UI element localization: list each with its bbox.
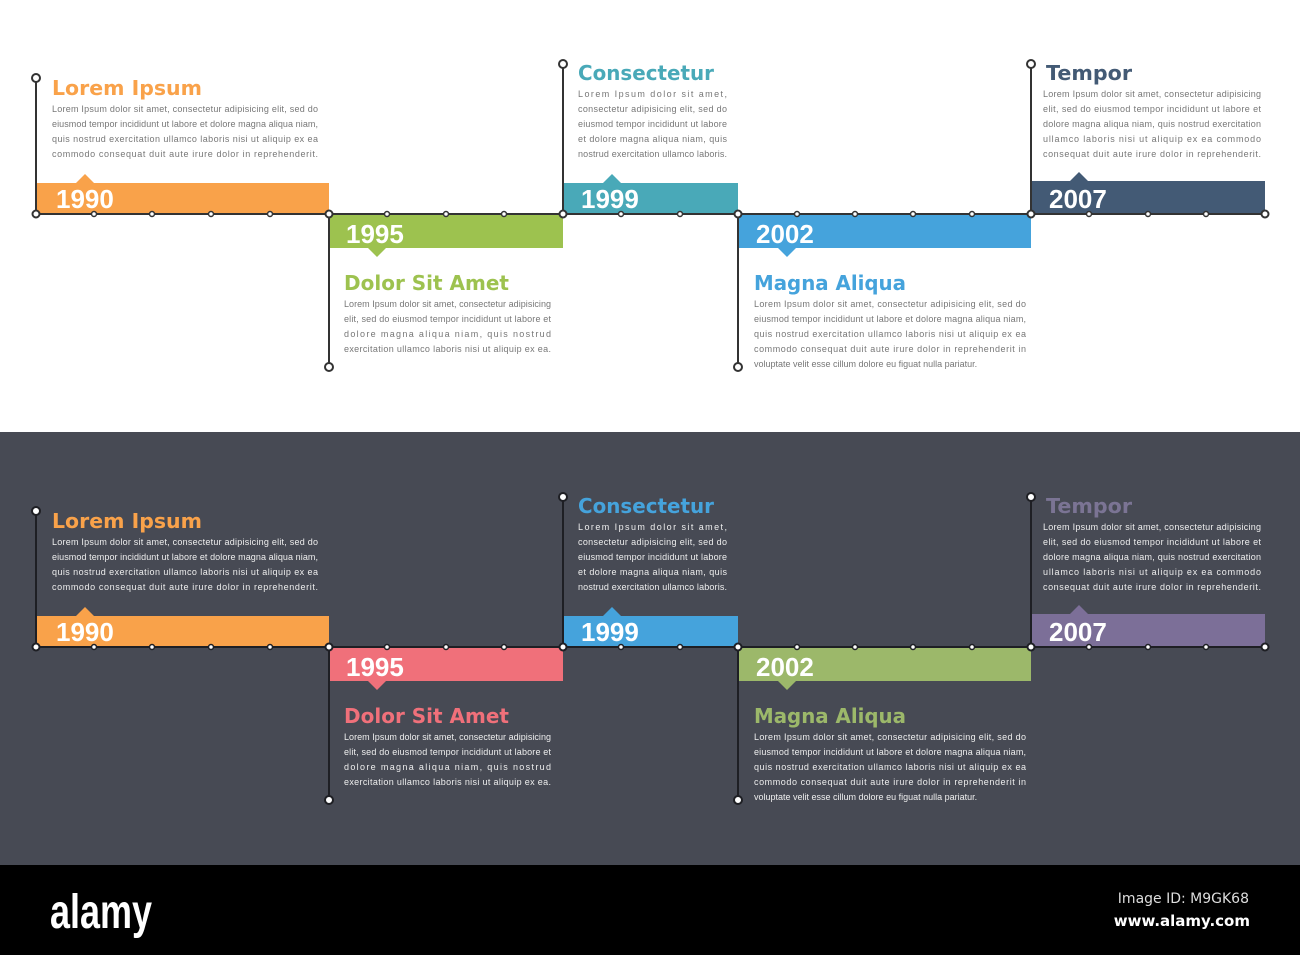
text: Dolor Sit Amet dark — [344, 704, 551, 787]
text: Consectetur dark: nostrud exercitation ullamco laboris. — [578, 582, 727, 592]
text: Dolor Sit Amet dark: dolore magna aliqua niam, quis nostrud — [344, 762, 551, 772]
footer: image id: www.alamy.com — [1114, 912, 1250, 930]
bar 1990 dark: 1990 — [56, 617, 114, 647]
text: Lorem Ipsum: Lorem Ipsum — [52, 76, 202, 100]
bar 2007 dark: 2007 — [1049, 617, 1107, 647]
bar 1990 dark — [36, 607, 329, 647]
text: Tempor: Tempor — [1046, 61, 1132, 85]
text: Magna Aliqua dark: commodo consequat duit aute irure dolor in reprehenderit in — [754, 777, 1026, 787]
text: Tempor: ullamco laboris nisi ut aliquip ex ea commodo — [1043, 134, 1261, 144]
text: Dolor Sit Amet: Lorem Ipsum dolor sit amet, consectetur adipisicing — [344, 299, 551, 309]
text: Lorem Ipsum dark: Lorem Ipsum — [52, 509, 202, 533]
text: Magna Aliqua: eiusmod tempor incididunt ut labore et dolore magna aliqua niam, — [754, 314, 1026, 324]
text: Dolor Sit Amet dark: Dolor Sit Amet — [344, 704, 509, 728]
text: Dolor Sit Amet — [344, 271, 551, 354]
panel: dark timeline — [32, 493, 1268, 804]
text: Magna Aliqua: quis nostrud exercitation ullamco laboris nisi ut aliquip ex ea — [754, 329, 1026, 339]
bar 1999 dark — [563, 607, 738, 647]
text: Magna Aliqua: commodo consequat duit aute irure dolor in reprehenderit in — [754, 344, 1026, 354]
bar 2002 — [738, 214, 1031, 257]
text: Magna Aliqua dark: eiusmod tempor incididunt ut labore et dolore magna aliqua niam, — [754, 747, 1026, 757]
bar 1999 — [563, 174, 738, 214]
text: Magna Aliqua dark — [754, 704, 1026, 802]
text: Consectetur: eiusmod tempor incididunt ut labore — [578, 119, 727, 129]
bar 2002 dark: 2002 — [756, 652, 814, 682]
text: Consectetur dark: et dolore magna aliqua niam, quis — [578, 567, 728, 577]
text: Dolor Sit Amet: dolore magna aliqua niam, quis nostrud — [344, 329, 551, 339]
text: Dolor Sit Amet dark: Lorem Ipsum dolor sit amet, consectetur adipisicing — [344, 732, 551, 742]
text: Magna Aliqua — [754, 271, 1026, 369]
text: Consectetur: Consectetur — [578, 61, 714, 85]
text: Consectetur — [578, 61, 728, 159]
text: Consectetur: et dolore magna aliqua niam, quis — [578, 134, 728, 144]
text: Magna Aliqua dark: Magna Aliqua — [754, 704, 906, 728]
text: Consectetur: Lorem Ipsum dolor sit amet, — [578, 89, 727, 99]
text: Tempor dark: consequat duit aute irure dolor in reprehenderit. — [1043, 582, 1261, 592]
text: Lorem Ipsum dark: quis nostrud exercitation ullamco laboris nisi ut aliquip ex ea — [52, 567, 318, 577]
text: Lorem Ipsum: Lorem Ipsum dolor sit amet, consectetur adipisicing elit, sed do — [52, 104, 318, 114]
text: Magna Aliqua dark: voluptate velit esse cillum dolore eu figuat nulla pariatur. — [754, 792, 977, 802]
text: Magna Aliqua dark: quis nostrud exercitation ullamco laboris nisi ut aliquip ex ea — [754, 762, 1026, 772]
text: Consectetur dark: Consectetur — [578, 494, 714, 518]
bar 1999 dark: 1999 — [581, 617, 639, 647]
bar 1990: 1990 — [56, 184, 114, 214]
text: Magna Aliqua: voluptate velit esse cillum dolore eu figuat nulla pariatur. — [754, 359, 977, 369]
text: Tempor dark: Tempor — [1046, 494, 1132, 518]
text: Tempor: consequat duit aute irure dolor in reprehenderit. — [1043, 149, 1261, 159]
text: Consectetur dark: eiusmod tempor incididunt ut labore — [578, 552, 727, 562]
text: Tempor: Lorem Ipsum dolor sit amet, consectetur adipisicing — [1043, 89, 1261, 99]
panel: light timeline — [32, 60, 1268, 371]
text: Dolor Sit Amet dark: exercitation ullamco laboris nisi ut aliquip ex ea. — [344, 777, 551, 787]
text: Dolor Sit Amet: elit, sed do eiusmod tempor incididunt ut labore et — [344, 314, 551, 324]
text: Magna Aliqua: Magna Aliqua — [754, 271, 906, 295]
text: Lorem Ipsum: quis nostrud exercitation ullamco laboris nisi ut aliquip ex ea — [52, 134, 318, 144]
timeline axis dark — [32, 493, 1268, 804]
text: Lorem Ipsum dark: eiusmod tempor incididunt ut labore et dolore magna aliqua niam, — [52, 552, 318, 562]
bar 1995: 1995 — [346, 219, 404, 249]
footer: image id — [1114, 891, 1250, 930]
text: Magna Aliqua: Lorem Ipsum dolor sit amet, consectetur adipisicing elit, sed do — [754, 299, 1026, 309]
text: Tempor dark: Lorem Ipsum dolor sit amet, consectetur adipisicing — [1043, 522, 1261, 532]
bar 2007: 2007 — [1049, 184, 1107, 214]
footer: image id: Image ID: M9GK68 — [1118, 891, 1249, 907]
bar 1995 dark — [329, 647, 563, 690]
text: Consectetur dark: consectetur adipisicing elit, sed do — [578, 537, 727, 547]
text: Dolor Sit Amet dark: elit, sed do eiusmod tempor incididunt ut labore et — [344, 747, 551, 757]
text: Lorem Ipsum dark: Lorem Ipsum dolor sit amet, consectetur adipisicing elit, sed do — [52, 537, 318, 547]
text: Tempor dark — [1043, 494, 1261, 592]
text: Consectetur dark — [578, 494, 728, 592]
bar 1999: 1999 — [581, 184, 639, 214]
bar 1995 dark: 1995 — [346, 652, 404, 682]
bar 2002: 2002 — [756, 219, 814, 249]
bar 1995 — [329, 214, 563, 257]
text: Lorem Ipsum — [52, 76, 318, 159]
text: Consectetur dark: Lorem Ipsum dolor sit amet, — [578, 522, 727, 532]
footer: alamy logo: alamy — [50, 886, 152, 939]
text: Tempor dark: dolore magna aliqua niam, quis nostrud exercitation — [1043, 552, 1261, 562]
text: Dolor Sit Amet: Dolor Sit Amet — [344, 271, 509, 295]
text: Consectetur: consectetur adipisicing elit, sed do — [578, 104, 727, 114]
text: Dolor Sit Amet: exercitation ullamco laboris nisi ut aliquip ex ea. — [344, 344, 551, 354]
text: Tempor dark: elit, sed do eiusmod tempor incididunt ut labore et — [1043, 537, 1261, 547]
bar 2007 dark — [1031, 605, 1265, 647]
text: Consectetur: nostrud exercitation ullamco laboris. — [578, 149, 727, 159]
text: Tempor: elit, sed do eiusmod tempor incididunt ut labore et — [1043, 104, 1261, 114]
bar 2007 — [1031, 172, 1265, 214]
text: Magna Aliqua dark: Lorem Ipsum dolor sit amet, consectetur adipisicing elit, sed do — [754, 732, 1026, 742]
bar 2002 dark — [738, 647, 1031, 690]
text: Lorem Ipsum dark — [52, 509, 318, 592]
text: Tempor: dolore magna aliqua niam, quis nostrud exercitation — [1043, 119, 1261, 129]
text: Lorem Ipsum: eiusmod tempor incididunt ut labore et dolore magna aliqua niam, — [52, 119, 318, 129]
text: Lorem Ipsum: commodo consequat duit aute irure dolor in reprehenderit. — [52, 149, 318, 159]
text: Tempor dark: ullamco laboris nisi ut aliquip ex ea commodo — [1043, 567, 1261, 577]
text: Lorem Ipsum dark: commodo consequat duit aute irure dolor in reprehenderit. — [52, 582, 318, 592]
text: Tempor — [1043, 61, 1261, 159]
timeline axis — [32, 60, 1268, 371]
bar 1990 — [36, 174, 329, 214]
